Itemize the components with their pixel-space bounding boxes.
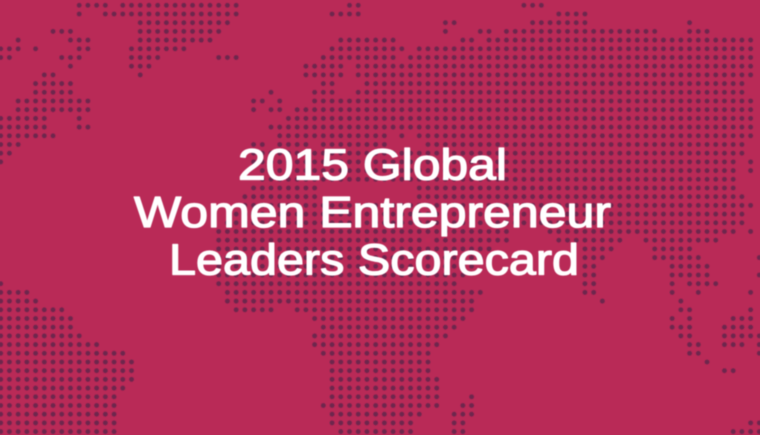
title line 2: Women Entrepreneur [134, 188, 611, 237]
title line 3: Leaders Scorecard [169, 236, 579, 284]
title [134, 140, 611, 284]
title line 1: 2015 Global [238, 140, 507, 190]
